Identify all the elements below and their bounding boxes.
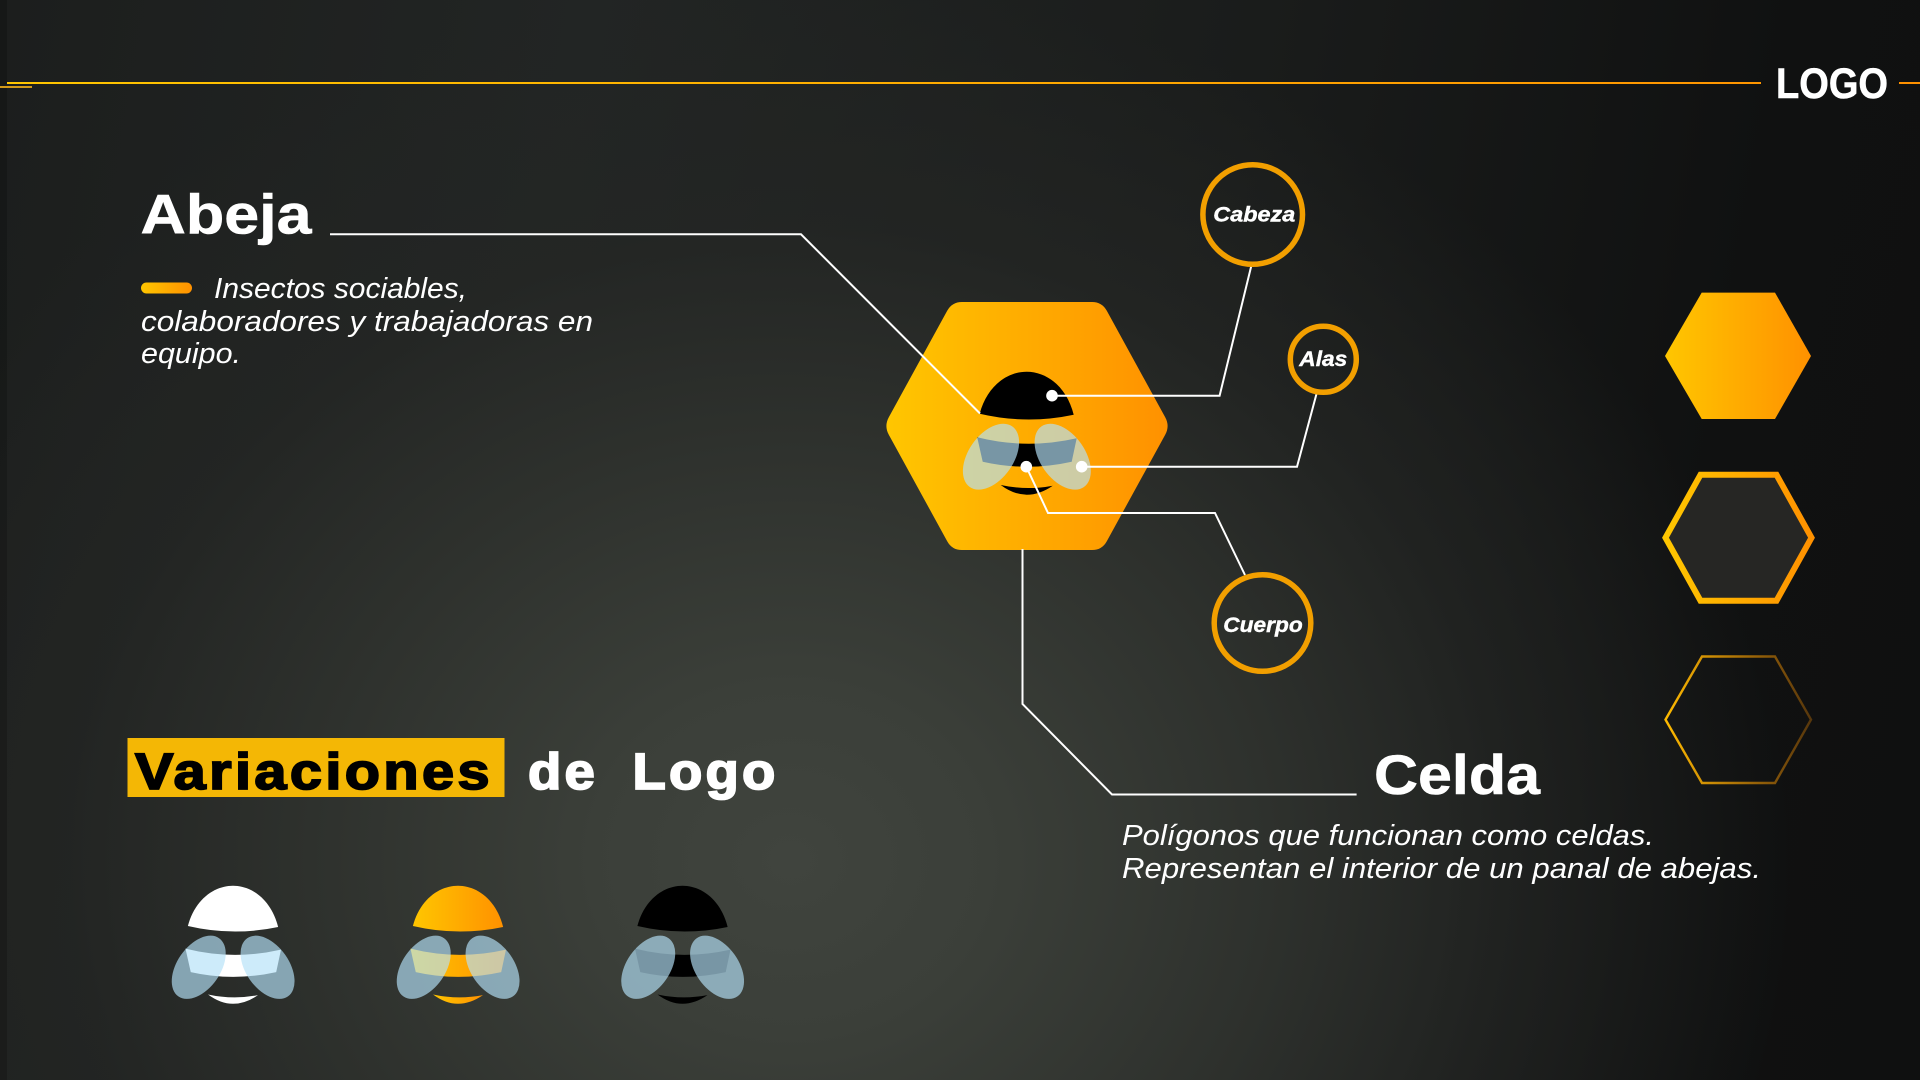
heading: Variaciones de Logo: Variaciones <box>135 743 493 800</box>
text block: Abeja description: equipo. <box>141 338 241 370</box>
text block: Celda description: Representan el interior de un panal de abejas. <box>1122 853 1761 885</box>
callout: Alas: Alas <box>1298 348 1347 371</box>
hexagon: thick outline <box>1666 475 1812 601</box>
heading: Celda: Celda <box>1374 743 1541 806</box>
text block: Celda description <box>1122 820 1761 885</box>
text block: Abeja description: colaboradores y trabajadoras en <box>141 306 593 338</box>
text block: Abeja description: Insectos sociables, <box>214 273 467 305</box>
heading: Variaciones de Logo: Logo <box>632 743 778 800</box>
heading: Variaciones de Logo <box>128 738 778 800</box>
icon: black bee <box>610 886 755 1009</box>
heading: Abeja: Abeja <box>140 182 312 246</box>
hexagon: thin faded outline <box>1666 656 1811 783</box>
connector: Cabeza <box>1046 263 1252 402</box>
main hexagon cell <box>886 302 1168 550</box>
connector: Alas <box>1076 392 1317 473</box>
text block: Celda description: Polígonos que funcionan como celdas. <box>1122 820 1654 852</box>
icon: white bee <box>161 886 306 1009</box>
text block: Abeja description <box>141 273 593 370</box>
callout: Cuerpo: Cuerpo <box>1223 614 1303 637</box>
callout: Cuerpo <box>1214 575 1311 671</box>
callout: Cabeza: Cabeza <box>1213 204 1296 226</box>
connector: Abeja to bee <box>330 234 980 414</box>
highlight box <box>128 738 504 797</box>
icon: main bee <box>951 372 1102 500</box>
callout: Cabeza <box>1203 165 1302 264</box>
heading: Variaciones de Logo: de <box>528 743 598 800</box>
header rule <box>0 82 1920 88</box>
icon: orange bee <box>386 886 531 1009</box>
logo wordmark: LOGO <box>1776 60 1888 108</box>
hexagon: solid fill <box>1665 293 1811 419</box>
callout: Alas <box>1290 326 1356 392</box>
connector: Cuerpo <box>1021 461 1245 575</box>
connector: Celda <box>1022 549 1357 794</box>
left edge strip <box>0 0 7 1080</box>
accent dash <box>141 282 192 294</box>
